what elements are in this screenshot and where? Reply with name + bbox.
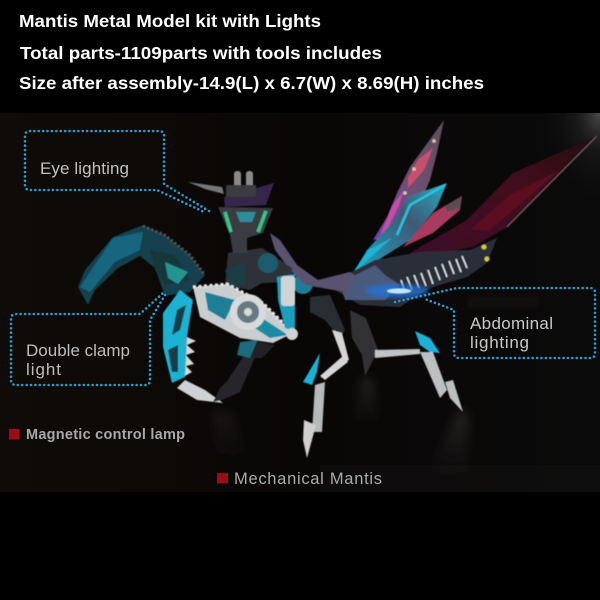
clamp white jaw (177, 380, 223, 403)
abdomen (335, 238, 497, 307)
abdominal blue glow (365, 284, 429, 298)
header text block: Size after assembly-14.9(L) x 6.7(W) x 8.69(H) inches (19, 73, 484, 93)
mantis model illustration (78, 120, 597, 458)
callout: abdominal lighting (395, 288, 595, 358)
rear leg (350, 310, 463, 412)
right femur white gear (193, 284, 293, 343)
wing: dark red large (410, 136, 597, 258)
wing: small pink (403, 196, 462, 247)
thorax and purple band (225, 233, 355, 292)
middle leg (303, 295, 349, 458)
callout: abdominal lighting: Abdominal (470, 314, 553, 333)
floor reflections (212, 378, 468, 480)
dark lower arm (213, 355, 256, 402)
cyan clamp arm (163, 290, 196, 383)
callout: double clamp light (11, 293, 165, 385)
label: mechanical mantis: Mechanical Mantis (234, 470, 382, 488)
callout: double clamp light: light (26, 360, 61, 379)
left raised claw (78, 225, 205, 305)
callout: abdominal lighting: lighting (470, 333, 529, 352)
head with eye lights (188, 171, 274, 253)
callout: double clamp light: Double clamp (26, 341, 130, 360)
rear-joint disc (293, 274, 313, 294)
photo panel background (0, 113, 600, 492)
header text block (19, 11, 484, 93)
wing: pink tall (373, 120, 444, 240)
header text block: Mantis Metal Model kit with Lights (19, 11, 321, 31)
callout: eye lighting: Eye lighting (40, 159, 129, 178)
wing: cyan lace (352, 183, 447, 275)
upright arm strut (277, 274, 298, 340)
callout: eye lighting (25, 131, 209, 212)
header text block: Total parts-1109parts with tools includes (20, 43, 382, 63)
label: magnetic control lamp: Magnetic control lamp (26, 427, 185, 443)
